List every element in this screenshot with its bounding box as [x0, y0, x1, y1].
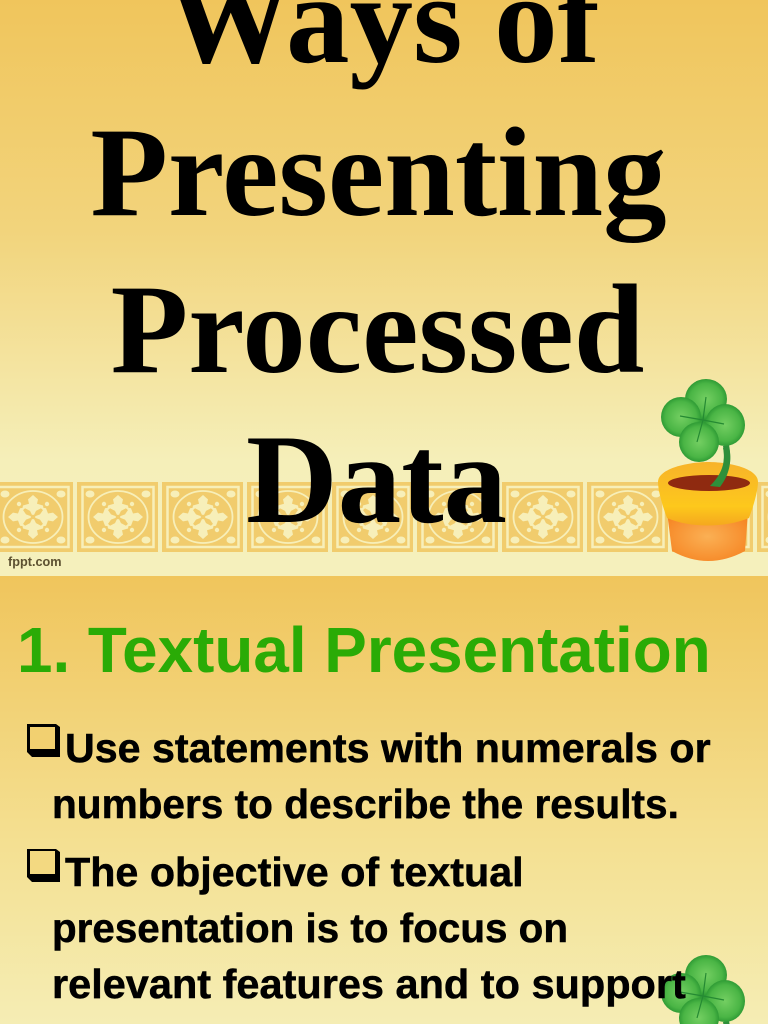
- bullet 2 text: The objective of textual: [65, 849, 524, 895]
- title: Data: [246, 410, 507, 550]
- bullet 2 text: [52, 849, 686, 1024]
- bullet 1 text: Use statements with numerals or: [65, 725, 711, 771]
- bullet 2 text: presentation is to focus on: [52, 905, 568, 951]
- icon: clover, cropped at the bottom edge: [661, 955, 745, 1024]
- icon: checkbox bullet: [27, 849, 60, 882]
- icon: potted four-leaf clover: [658, 379, 758, 561]
- bullet 1 text: [52, 725, 711, 827]
- bullet 2: [27, 849, 686, 1024]
- bullet 2 text: relevant features and to support: [52, 961, 686, 1007]
- title: Processed: [111, 260, 644, 400]
- title: [90, 0, 667, 550]
- bullet 1 text: numbers to describe the results.: [52, 781, 679, 827]
- heading: 1. Textual Presentation: [17, 614, 711, 686]
- ornamental tile band: [0, 482, 768, 552]
- fppt.com watermark: fppt.com: [8, 555, 62, 569]
- panel: title slide: [0, 0, 768, 576]
- title: Presenting: [90, 103, 667, 243]
- bullet 1: [27, 724, 711, 827]
- panel: textual presentation slide: [0, 576, 768, 1024]
- icon: checkbox bullet: [27, 724, 60, 757]
